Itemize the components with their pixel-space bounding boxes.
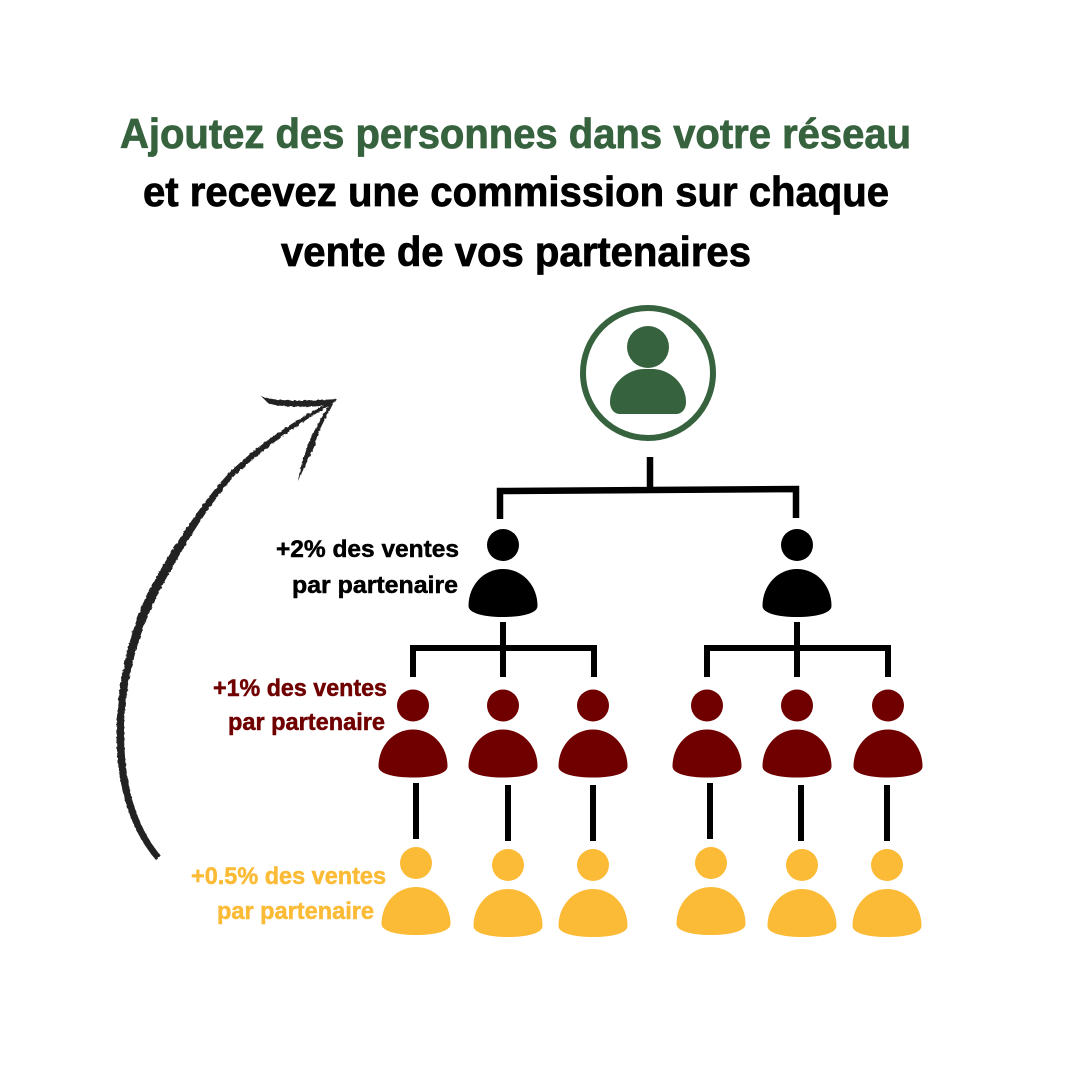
label: +1%: +1% des ventes [213, 675, 387, 702]
circle outline [583, 308, 713, 438]
title line 1: Ajoutez des personnes dans votre réseau [120, 110, 911, 157]
label: +0.5% [191, 863, 386, 925]
label: +2%: +2% des ventes [276, 536, 459, 563]
connectors: left branch [413, 622, 594, 677]
connectors: right branch [707, 622, 888, 677]
label: +0.5%: par partenaire [217, 898, 374, 925]
person body [610, 369, 686, 414]
title line 3: vente de vos partenaires [281, 228, 751, 275]
label: +1% [213, 675, 387, 736]
label: +2%: par partenaire [292, 572, 458, 599]
title line 2: et recevez une commission sur chaque [143, 168, 889, 215]
partners level 2 (maroon) [378, 690, 922, 778]
top person in circle [583, 308, 713, 438]
partners level 1 (black) [468, 529, 832, 617]
person head [627, 326, 669, 368]
icon: hand-drawn curved arrow [116, 396, 337, 860]
title [120, 110, 911, 275]
label: +2% [276, 536, 459, 599]
label: +1%: par partenaire [228, 709, 385, 736]
connectors: maroon to yellow [416, 783, 887, 841]
partners level 3 (yellow) [382, 847, 922, 937]
connectors: top tree [500, 457, 796, 519]
label: +0.5%: +0.5% des ventes [191, 863, 386, 890]
